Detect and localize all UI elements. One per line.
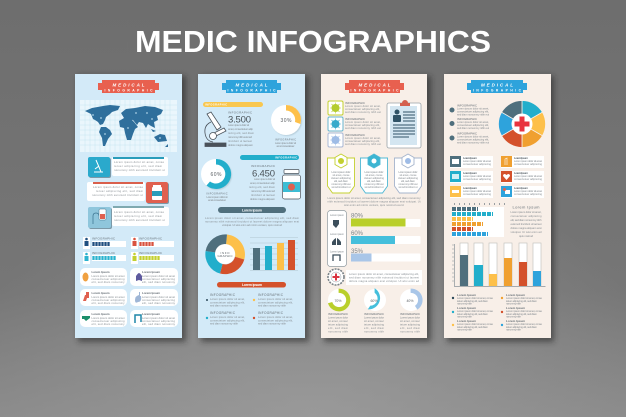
donut: 30% — [271, 105, 302, 148]
donut: 70%: elit, sed diam — [328, 326, 349, 330]
bullet item 2: Lorem ipsum dolor sit amet, — [457, 120, 489, 124]
bar chart — [250, 238, 298, 270]
bullet item 3: Lorem ipsum dolor sit amet, — [457, 134, 489, 138]
bullet item 2: INFOGRAPHIC — [457, 117, 478, 121]
panel: cream poster with pie — [444, 74, 554, 342]
legend: blue: tetuer adipiscing elit, sed diam — [506, 325, 538, 329]
legend: teal: Lorem Ipsum — [457, 306, 476, 310]
donut: 60%: Lorem ipsum dolor — [364, 316, 384, 320]
legend: orange: Lorem ipsum dolor sit amet, conse — [506, 296, 542, 300]
legend: red: Lorem ipsum dolor sit amet, conse — [506, 309, 542, 313]
bullet item 1: consectetuer adipiscing elit, — [457, 110, 489, 114]
progress bar: 35% — [351, 249, 420, 262]
stats: teal people bar — [83, 251, 126, 264]
stat 6.450: tincidunt ut laoreet — [251, 193, 275, 197]
stat 3.500: Lorem ipsum dolor sit — [228, 123, 249, 127]
legend item: red — [253, 311, 293, 326]
organ side panel: Lorem ipsum — [330, 250, 345, 254]
progress bar: 35%: 35% — [351, 249, 364, 255]
donut: 40%: Lorem ipsum dolor — [400, 316, 420, 320]
banner — [345, 80, 404, 93]
legend: slate — [452, 293, 494, 306]
item: medicine bottle — [87, 182, 169, 204]
bullet item 3: INFOGRAPHIC — [457, 132, 478, 136]
paragraph: Lorem ipsum dolor sit amet, consectetuer adipiscing elit, sed diam — [205, 216, 300, 220]
stat 6.450: Lorem ipsum dolor sit — [254, 177, 275, 181]
donut: 60%: amet consectetuer — [208, 198, 226, 202]
text block: Lorem Ipsum — [512, 204, 540, 210]
bullet item 1 — [450, 104, 489, 116]
organ card: liver green — [80, 310, 127, 327]
organ card: intestine — [130, 310, 178, 327]
virus item: periwinkle: sed diam nonummy nibh eui — [345, 142, 381, 146]
banner: MEDICAL — [358, 82, 391, 88]
shield card: lime — [328, 154, 354, 193]
bullet item 3 — [450, 132, 489, 144]
donut: 60% — [201, 159, 232, 202]
progress bar: 80% — [351, 214, 420, 227]
stat 6.450: iscing elit, sed diam — [249, 185, 276, 189]
donut: 70%: nonummy nibh — [328, 330, 348, 334]
donut: 70%: INFOGRAPHIC — [328, 312, 349, 316]
organ card: lungs: consectetuer adipiscing — [142, 277, 176, 281]
legend item: yellow — [253, 293, 293, 308]
stat 3.500: dolore magna aliquam — [228, 143, 254, 147]
donut: 60% — [364, 289, 386, 334]
organ card: intestine: Lorem Ipsum — [142, 312, 160, 316]
stat 3.500: INFOGRAPHIC — [228, 110, 253, 114]
organ card: liver: Lorem ipsum dolor sit amet — [92, 274, 125, 278]
icon: clipboard — [387, 100, 421, 148]
legend: blue: nonummy nibh — [506, 328, 522, 332]
virus item: periwinkle: Lorem ipsum dolor sit amet, — [345, 136, 381, 140]
legend: teal: nonummy nibh — [457, 314, 472, 318]
stat 6.450: 6.450 — [252, 168, 275, 180]
icon card: blue: Lorem Ipsum — [514, 186, 528, 190]
donut: 60%: nonummy nibh — [364, 330, 384, 334]
gear callout: Lorem ipsum dolor sit amet, consectetuer adipiscing elit, — [349, 272, 419, 276]
donut: 40%: sit amet, consec — [400, 319, 421, 323]
legend item: dark: Lorem ipsum dolor sit amet, — [210, 297, 245, 301]
text block — [510, 204, 542, 238]
gear callout: dolore magna aliquam erat volutpat. Ut wisi enim ad — [349, 279, 420, 283]
legend: teal: tetuer adipiscing elit, sed diam — [457, 312, 489, 316]
icon card: teal — [450, 171, 493, 183]
virus item: lime: sed diam nonummy nibh eui — [345, 110, 381, 114]
stat 6.450 — [249, 164, 276, 201]
organ card: lungs: Lorem ipsum dolor sit amet — [142, 274, 175, 278]
organ card: intestine: elit, sed diam nonummy — [142, 322, 176, 326]
donut chart: GRAPHIC — [218, 254, 233, 258]
text block: elit, sed diam nonummy nibh — [510, 218, 542, 222]
item: microscope: tetuer adipiscing elit, sed diam — [114, 164, 163, 168]
legend item: dark: INFOGRAPHIC — [210, 293, 236, 297]
bullet item 1: Lorem ipsum dolor sit amet, — [457, 106, 489, 110]
legend: red: Lorem Ipsum — [506, 306, 525, 310]
legend item: teal: sed diam nonummy nibh — [210, 322, 238, 326]
shield card: lime: nonummy nibh eui — [332, 182, 351, 186]
organ card: heart: consectetuer adipiscing — [92, 298, 125, 302]
shield card: periwinkle: nonummy nibh eui — [398, 182, 418, 186]
banner: INFOGRAPHIC — [473, 88, 522, 92]
icon card: yellow: consectetuer adipiscing — [463, 192, 492, 196]
red heading pill — [217, 282, 286, 288]
legend: blue: Lorem ipsum dolor sit amet, conse — [506, 322, 542, 326]
legend item: teal: INFOGRAPHIC — [210, 311, 236, 315]
donut chart — [205, 234, 245, 274]
virus item: teal: INFOGRAPHIC — [345, 117, 366, 121]
legend: orange: nonummy nibh — [506, 302, 522, 306]
icon card: teal: Lorem ipsum dolor sit amet — [463, 174, 491, 178]
progress bar: 60% — [351, 231, 420, 244]
legend: yellow: tetuer adipiscing elit, sed diam — [457, 325, 489, 329]
donut: 60%: sit amet, consec — [364, 319, 385, 323]
legend: red — [501, 306, 542, 318]
shield card: lime: smod tincidunt ut — [332, 185, 351, 189]
legend: orange: Lorem Ipsum — [506, 293, 525, 297]
donut: 70%: tetuer adipiscing — [328, 322, 348, 326]
banner: INFOGRAPHIC — [104, 88, 153, 92]
virus item: lime: consectetuer adipiscing elit, — [345, 107, 380, 111]
virus item: periwinkle: consectetuer adipiscing elit, — [345, 139, 380, 143]
donut: 60%: INFOGRAPHIC — [364, 312, 385, 316]
donut: 40% — [400, 289, 422, 334]
virus item: teal — [328, 117, 381, 131]
item: microscope — [88, 157, 168, 178]
donut: 60%: 60% — [210, 172, 222, 178]
icon card: yellow: Lorem ipsum dolor sit amet — [463, 189, 491, 193]
donut: 60%: tetuer adipiscing — [364, 322, 384, 326]
icon card: red: consectetuer adipiscing — [514, 177, 542, 181]
banner: INFOGRAPHIC — [228, 88, 276, 92]
donut: 70%: Lorem ipsum dolor — [328, 316, 348, 320]
item: blood bag: Lorem ipsum dolor sit amet, conse — [114, 210, 164, 214]
icon card: red: Lorem ipsum dolor sit amet — [514, 174, 542, 178]
legend item: red: consectetuer adipiscing elit, — [258, 318, 293, 322]
progress bar: 80%: 80% — [351, 214, 364, 220]
legend item: teal — [206, 311, 245, 326]
legend item: red: sed diam nonummy nibh — [258, 322, 286, 326]
legend item: dark — [206, 293, 245, 308]
shield card: teal: elit, sed diam — [367, 179, 382, 183]
bullet item 1: sed diam nonummy nibh eui — [457, 112, 489, 116]
panel: blue poster with charts — [198, 74, 309, 342]
pie chart with cross — [498, 100, 546, 148]
legend: yellow: Lorem ipsum dolor sit amet, conse — [457, 322, 494, 326]
legend: blue: Lorem Ipsum — [506, 319, 525, 323]
legend: teal: Lorem ipsum dolor sit amet, conse — [457, 309, 494, 313]
stat 3.500: iscing elit, sed diam — [228, 131, 255, 135]
organ card: liver: elit, sed diam nonummy — [92, 280, 125, 284]
virus item: periwinkle: INFOGRAPHIC — [345, 133, 366, 137]
organ card: heart: Lorem Ipsum — [92, 291, 110, 295]
icon card: teal: consectetuer adipiscing — [463, 177, 492, 181]
text block: quis nostrud — [519, 234, 534, 238]
virus item: lime: INFOGRAPHIC — [345, 101, 366, 105]
paragraph: volutpat. Ut wisi enim ad minim veniam, quis nostrud — [222, 223, 282, 227]
icon card: blue: consectetuer adipiscing — [514, 192, 542, 196]
item: microscope: nonummy nibh euismod tincidunt ut — [114, 168, 165, 172]
donut: 60%: Lorem ipsum dolor sit — [206, 195, 228, 199]
gear callout: sed diam nonummy nibh euismod tincidunt ut laoreet — [349, 276, 419, 280]
shield card: periwinkle: ctetuer adipiscing — [398, 176, 418, 180]
item: medicine bottle: nonummy nibh euismod tincidunt ut — [92, 193, 143, 197]
donut: 70%: 70% — [334, 299, 342, 303]
icon card: yellow — [450, 186, 493, 198]
paragraph: Lorem ipsum dolor sit amet, consectetuer adipiscing elit, sed diam nonummy — [328, 196, 421, 200]
bullet item 2: sed diam nonummy nibh eui — [457, 126, 489, 130]
shield card: lime: elit, sed diam — [334, 179, 349, 183]
shield card: teal: ctetuer adipiscing — [364, 176, 384, 180]
organ card: liver — [80, 268, 127, 286]
icon card: orange — [501, 156, 544, 168]
item: blood bag — [88, 206, 169, 229]
text block: euismod tincidunt ut laoreet — [510, 222, 542, 226]
icon: bottle — [282, 170, 300, 199]
donut: 40%: INFOGRAPHIC — [400, 312, 421, 316]
stats: red people bar: INFOGRAPHIC — [139, 236, 163, 240]
organ side panel: Lorem ipsum — [330, 213, 345, 217]
stats: teal people bar: INFOGRAPHIC — [92, 251, 116, 255]
organ card: stomach: elit, sed diam nonummy — [142, 301, 176, 305]
icon card: yellow: Lorem Ipsum — [463, 186, 477, 190]
icon card: red — [501, 171, 544, 183]
stats: red people bar — [131, 236, 174, 249]
stats: lime people bar — [131, 251, 174, 264]
icon card: slate: Lorem ipsum dolor sit amet — [463, 159, 491, 163]
red heading pill: Lorem ipsum — [242, 283, 262, 287]
organ card: intestine: consectetuer adipiscing — [142, 319, 176, 323]
organ card: liver: Lorem Ipsum — [92, 270, 110, 274]
organ card: liver green: consectetuer adipiscing — [92, 319, 125, 323]
column chart — [452, 243, 546, 286]
bullet item 2: consectetuer adipiscing elit, — [457, 123, 489, 127]
organ card: liver: consectetuer adipiscing — [92, 277, 125, 281]
legend item: teal: Lorem ipsum dolor sit amet, — [210, 315, 245, 319]
stat 6.450: dolore magna aliquam — [250, 197, 276, 201]
paragraph: nonummy nibh euismod tincidunt ut laoreet dolore magna aliquam erat — [205, 220, 299, 224]
shield card: teal — [360, 154, 388, 193]
legend item: teal: consectetuer adipiscing elit, — [210, 318, 245, 322]
stats: navy people bar: INFOGRAPHIC — [92, 236, 116, 240]
virus item: lime: Lorem ipsum dolor sit amet, — [345, 104, 381, 108]
world map — [80, 100, 177, 152]
legend item: yellow: INFOGRAPHIC — [258, 293, 284, 297]
paragraph — [328, 196, 421, 207]
icon card: blue — [501, 186, 544, 198]
stat 6.450: nonummy nibh euismod — [251, 189, 276, 193]
item: blood bag: nonummy nibh euismod tincidunt ut — [114, 218, 165, 222]
icon card: orange: consectetuer adipiscing — [514, 162, 542, 166]
paragraph — [205, 216, 300, 227]
item: microscope: Lorem ipsum dolor sit amet, conse — [114, 160, 164, 164]
organ card: heart: Lorem ipsum dolor sit amet — [92, 295, 125, 299]
donut: 60%: INFOGRAPHIC — [206, 192, 228, 196]
legend: teal — [452, 306, 494, 318]
virus item: teal: Lorem ipsum dolor sit amet, — [345, 120, 381, 124]
organ card: stomach — [130, 289, 178, 306]
organ card: liver green: elit, sed diam nonummy — [92, 322, 125, 326]
icon card: red: Lorem Ipsum — [514, 171, 528, 175]
legend: slate: Lorem ipsum dolor sit amet, conse — [457, 296, 494, 300]
shield card: lime: Lorem ipsum dolor — [332, 170, 351, 174]
shield card: periwinkle: sit amet, conse — [400, 173, 417, 177]
legend item: red: INFOGRAPHIC — [258, 311, 284, 315]
yellow heading bar: INFOGRAPHIC — [205, 104, 227, 106]
shield card: periwinkle: Lorem ipsum dolor — [398, 170, 418, 174]
donut: 70% — [328, 289, 350, 334]
banner: MEDICAL — [481, 82, 513, 88]
title: MEDIC INFOGRAPHICS — [135, 24, 491, 59]
organ card: stomach: consectetuer adipiscing — [142, 298, 176, 302]
legend item: yellow: consectetuer adipiscing elit, — [258, 300, 293, 304]
organ card: intestine: Lorem ipsum dolor sit amet — [142, 316, 175, 320]
legend item: dark: consectetuer adipiscing elit, — [210, 300, 245, 304]
organ card: lungs — [130, 268, 178, 286]
shield card: periwinkle: smod tincidunt ut — [398, 185, 418, 189]
donut: 30%: Lorem ipsum dolor sit — [275, 141, 296, 145]
bullet item 3: sed diam nonummy nibh eui — [457, 140, 489, 144]
legend item: dark: sed diam nonummy nibh — [210, 304, 238, 308]
stat 3.500: tincidunt ut laoreet — [228, 139, 252, 143]
legend: red: nonummy nibh — [506, 314, 522, 318]
shield card: teal: nonummy nibh eui — [364, 182, 384, 186]
donut: 70%: sit amet, consec — [328, 319, 349, 323]
icon card: slate — [450, 156, 493, 168]
shield card: periwinkle: elit, sed diam — [401, 179, 416, 183]
legend: slate: nonummy nibh — [457, 302, 472, 306]
shield card: teal: smod tincidunt ut — [364, 185, 384, 189]
bullet item 2 — [450, 117, 489, 130]
banner — [467, 80, 527, 93]
heat grid — [452, 204, 506, 237]
shield card: lime: sit amet, conse — [332, 173, 350, 177]
shield card: periwinkle — [394, 154, 422, 193]
donut: 40%: elit, sed diam — [400, 326, 421, 330]
legend item: red: Lorem ipsum dolor sit amet, — [258, 315, 293, 319]
paragraph: wisi enim ad minim veniam, quis nostrud exerci — [344, 203, 404, 207]
icon card: slate: consectetuer adipiscing — [463, 162, 492, 166]
icon card: slate: Lorem Ipsum — [463, 156, 477, 160]
legend: orange: tetuer adipiscing elit, sed diam — [506, 299, 538, 303]
icon card: orange: Lorem ipsum dolor sit amet — [514, 159, 542, 163]
legend: yellow — [452, 319, 494, 332]
donut: 40%: tetuer adipiscing — [400, 322, 420, 326]
banner — [98, 80, 159, 93]
icon card: blue: Lorem ipsum dolor sit amet — [514, 189, 542, 193]
donut: 30%: INFOGRAPHIC — [275, 138, 296, 142]
legend: slate: tetuer adipiscing elit, sed diam — [457, 299, 489, 303]
organ card: liver green: Lorem Ipsum — [92, 312, 110, 316]
donut: 40%: nonummy nibh — [400, 330, 420, 334]
organ card: lungs: Lorem Ipsum — [142, 270, 160, 274]
stat 6.450: INFOGRAPHIC — [251, 164, 276, 168]
item: blood bag: tetuer adipiscing elit, sed diam — [114, 214, 163, 218]
legend: orange — [501, 293, 542, 306]
legend: yellow: Lorem Ipsum — [457, 319, 476, 323]
legend item: yellow: Lorem ipsum dolor sit amet, — [258, 297, 293, 301]
organ card: stomach: Lorem Ipsum — [142, 291, 160, 295]
donut: 60%: elit, sed diam — [364, 326, 385, 330]
organ side panel — [328, 210, 346, 266]
teal heading bar: INFOGRAPHIC — [275, 156, 297, 160]
virus item: lime — [328, 101, 381, 115]
bullet item 1: INFOGRAPHIC — [457, 104, 478, 108]
shield card: teal: Lorem ipsum dolor — [364, 170, 384, 174]
donut: 30%: 30% — [280, 118, 292, 124]
organ card: stomach: Lorem ipsum dolor sit amet — [142, 295, 175, 299]
gear callout — [328, 269, 422, 285]
donut: 40%: 40% — [406, 299, 414, 303]
virus item: periwinkle — [328, 133, 381, 147]
text block: volutpat. Ut wisi enim ad — [510, 230, 542, 234]
stat 3.500: amet, consectetuer adip — [228, 127, 254, 131]
banner: MEDICAL — [236, 82, 268, 88]
legend: yellow: nonummy nibh — [457, 328, 472, 332]
stat 3.500 — [228, 110, 255, 147]
shield card: teal: sit amet, conse — [366, 173, 383, 177]
teal heading bar — [240, 155, 299, 160]
panel: blue poster with map — [75, 74, 186, 342]
donut: 60%: 60% — [370, 299, 378, 303]
banner: INFOGRAPHIC — [350, 88, 399, 92]
paragraph: nibh euismod tincidunt ut laoreet dolore magna aliquam erat volutpat. Ut — [328, 200, 421, 204]
text block: consectetuer adipiscing — [510, 214, 542, 218]
progress bar: 60%: 60% — [351, 231, 364, 237]
organ card: liver green: Lorem ipsum dolor sit amet — [92, 316, 125, 320]
legend: blue — [501, 319, 542, 332]
donut chart: INFO — [220, 251, 230, 255]
organ card: lungs: elit, sed diam nonummy — [142, 280, 176, 284]
organ card: heart — [80, 289, 127, 306]
stat 3.500: nonummy nibh euismod — [228, 135, 252, 139]
legend: slate: Lorem Ipsum — [457, 293, 476, 297]
dark heading pill: Lorem ipsum — [242, 208, 262, 212]
yellow heading bar — [203, 102, 263, 107]
legend: red: tetuer adipiscing elit, sed diam — [506, 312, 538, 316]
stats: lime people bar: INFOGRAPHIC — [139, 251, 163, 255]
icon card: orange: Lorem Ipsum — [514, 156, 528, 160]
dark heading pill — [218, 207, 286, 213]
text block: Lorem ipsum dolor sit amet, — [510, 210, 542, 214]
bullet item 3: consectetuer adipiscing elit, — [457, 138, 489, 142]
stat 6.450: amet, consectetuer adip — [250, 181, 276, 185]
virus item: teal: sed diam nonummy nibh eui — [345, 126, 381, 130]
organ card: heart: elit, sed diam nonummy — [92, 301, 125, 305]
icon card: teal: Lorem Ipsum — [463, 171, 477, 175]
stats: navy people bar — [83, 236, 126, 249]
item: medicine bottle: tetuer adipiscing elit, sed diam — [96, 189, 144, 193]
legend item: yellow: sed diam nonummy nibh — [258, 304, 286, 308]
text block: dolore magna aliquam erat — [510, 226, 542, 230]
icon: microscope — [205, 112, 226, 146]
stat 3.500: 3.500 — [228, 114, 251, 126]
panel: cream poster with progress bars — [321, 74, 431, 342]
shield card: lime: ctetuer adipiscing — [331, 176, 352, 180]
donut: 30%: amet consectetuer — [276, 144, 295, 148]
organ side panel: Lorem ipsum — [330, 232, 345, 236]
banner — [222, 80, 281, 93]
virus item: teal: consectetuer adipiscing elit, — [345, 123, 380, 127]
banner: MEDICAL — [112, 82, 145, 88]
item: medicine bottle: Lorem ipsum dolor sit amet, conse — [93, 185, 144, 189]
